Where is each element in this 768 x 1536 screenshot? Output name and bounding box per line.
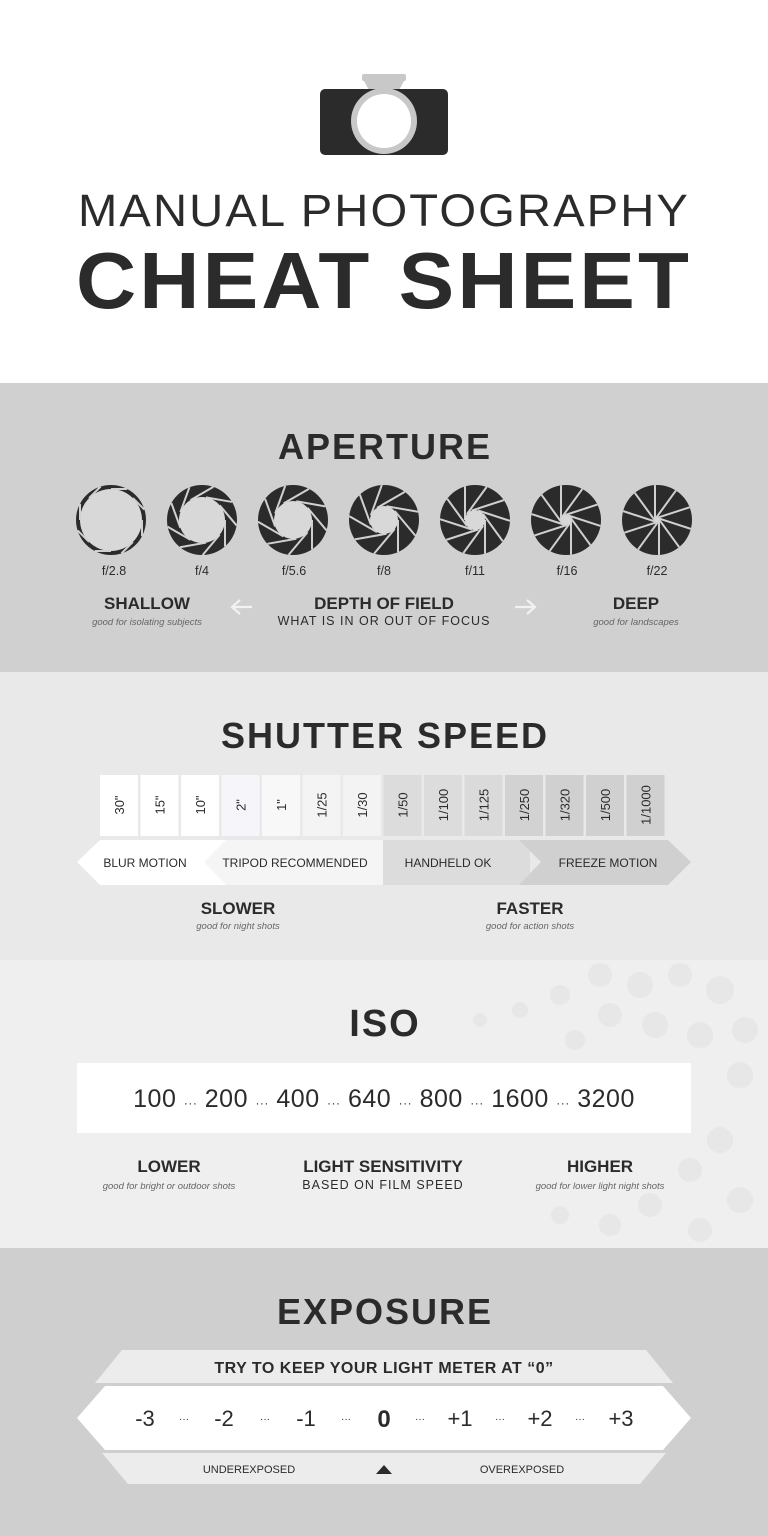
panel: shutter speed <box>0 672 768 960</box>
iso scale box: 100 ··· 200 ··· 400 ··· 640 ··· 800 ··· 1600 ··· 3200 <box>133 1085 635 1113</box>
exposure scale: ··· <box>495 1414 505 1425</box>
slower / faster labels <box>196 899 574 932</box>
shutter speed boxes: 15" <box>152 795 168 815</box>
panel: iso <box>0 960 768 1248</box>
slower / faster labels: good for night shots <box>196 921 280 932</box>
motion arrows: HANDHELD OK <box>405 856 491 870</box>
iso labels: LIGHT SENSITIVITY <box>303 1157 463 1176</box>
shutter speed boxes: 2" <box>234 799 248 811</box>
slower / faster labels: FASTER <box>496 899 564 918</box>
aperture icons <box>76 485 692 555</box>
slower / faster labels: SLOWER <box>201 899 275 918</box>
motion arrows: BLUR MOTION <box>103 856 187 870</box>
panel: exposure <box>0 1248 768 1536</box>
shutter speed boxes: 1/1000 <box>638 785 654 825</box>
f-stop labels: f/11 <box>465 564 485 578</box>
under/over band: UNDEREXPOSED <box>203 1464 295 1476</box>
exposure scale: ··· <box>179 1414 189 1425</box>
header panel <box>0 0 768 383</box>
exposure scale: 0 <box>377 1406 391 1433</box>
iso labels: BASED ON FILM SPEED <box>302 1178 464 1192</box>
shutter speed boxes: 1/25 <box>314 792 330 818</box>
heading: iso: ISO <box>349 1003 421 1045</box>
exposure scale: +1 <box>447 1406 473 1431</box>
iso labels: HIGHER <box>567 1157 633 1176</box>
f-stop labels: f/2.8 <box>102 564 126 578</box>
under/over band: OVEREXPOSED <box>480 1464 564 1476</box>
shutter speed boxes: 1" <box>274 799 289 811</box>
meter tip band <box>95 1350 673 1383</box>
exposure scale: ··· <box>575 1414 585 1425</box>
f-stop labels: f/5.6 <box>282 564 306 578</box>
iso scale box <box>77 1063 691 1133</box>
motion arrows: FREEZE MOTION <box>559 856 657 870</box>
depth of field labels: WHAT IS IN OR OUT OF FOCUS <box>278 614 490 628</box>
f-stop labels: f/8 <box>377 564 391 578</box>
f-stop labels: f/4 <box>195 564 209 578</box>
shutter speed boxes: 1/100 <box>436 789 451 821</box>
shutter speed boxes: 10" <box>193 795 208 815</box>
shutter speed boxes: 30" <box>112 795 127 815</box>
exposure scale: +3 <box>608 1406 634 1431</box>
f-stop labels: f/16 <box>557 564 577 578</box>
iso labels <box>103 1157 665 1192</box>
heading: exposure: EXPOSURE <box>277 1291 493 1332</box>
exposure scale: ··· <box>341 1414 351 1425</box>
depth of field labels <box>92 594 679 628</box>
depth of field labels: good for landscapes <box>593 617 679 628</box>
exposure scale: ··· <box>415 1414 425 1425</box>
motion arrows: TRIPOD RECOMMENDED <box>222 856 368 870</box>
iso labels: good for bright or outdoor shots <box>103 1181 236 1192</box>
depth of field labels: DEPTH OF FIELD <box>314 594 454 613</box>
iso labels: LOWER <box>137 1157 201 1176</box>
shutter speed boxes: 1/320 <box>558 789 572 821</box>
exposure scale <box>77 1386 691 1450</box>
exposure scale: ··· <box>260 1414 270 1425</box>
f-stop labels: f/22 <box>647 564 667 578</box>
title <box>76 185 692 325</box>
exposure scale: -2 <box>214 1406 234 1431</box>
shutter speed boxes: 1/250 <box>517 789 532 821</box>
title: CHEAT SHEET <box>76 236 692 325</box>
shutter speed boxes: 1/500 <box>598 789 613 821</box>
motion arrows <box>77 840 691 885</box>
icon: camera <box>320 74 448 155</box>
exposure scale: +2 <box>527 1406 553 1431</box>
shutter speed boxes: 1/125 <box>476 789 492 821</box>
panel: aperture <box>0 383 768 672</box>
exposure scale: -3 <box>135 1406 155 1431</box>
depth of field labels: DEEP <box>613 594 659 613</box>
meter tip band: TRY TO KEEP YOUR LIGHT METER AT “0” <box>214 1360 554 1377</box>
depth of field labels: SHALLOW <box>104 594 191 613</box>
slower / faster labels: good for action shots <box>486 921 574 932</box>
under/over band <box>102 1453 666 1484</box>
heading: shutter speed: SHUTTER SPEED <box>221 715 549 756</box>
depth of field labels: good for isolating subjects <box>92 617 202 628</box>
exposure scale: -1 <box>296 1406 316 1431</box>
heading: aperture: APERTURE <box>278 426 492 467</box>
shutter speed boxes: 1/50 <box>396 792 410 818</box>
shutter speed boxes: 1/30 <box>355 792 370 818</box>
shutter speed boxes <box>100 775 664 836</box>
title: MANUAL PHOTOGRAPHY <box>78 185 690 236</box>
iso labels: good for lower light night shots <box>536 1181 665 1192</box>
f-stop labels <box>102 564 667 578</box>
